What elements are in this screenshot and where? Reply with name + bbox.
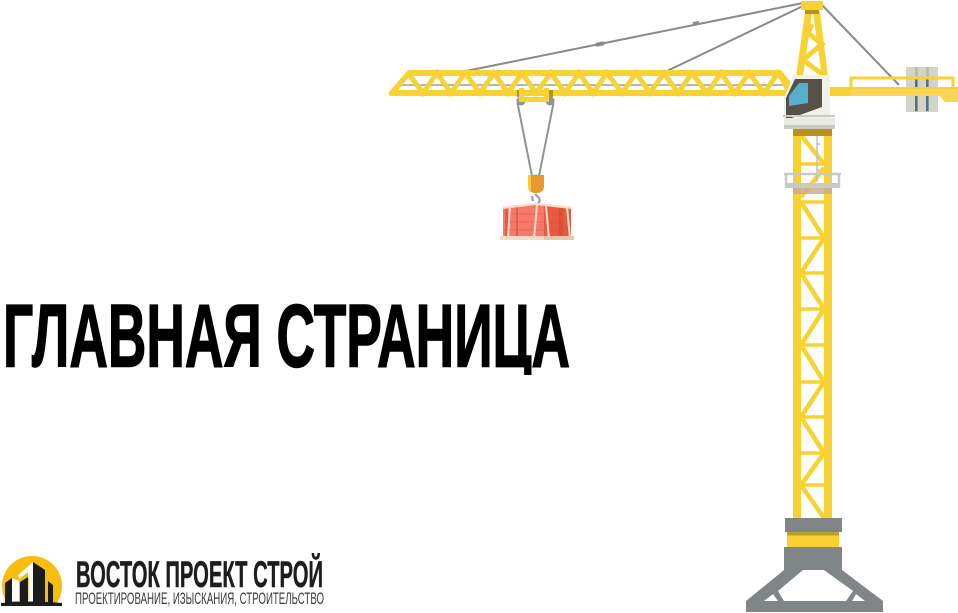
counter-jib with rail — [830, 78, 958, 102]
tower mast lattice — [793, 128, 832, 518]
hook block — [528, 174, 544, 203]
page title: ГЛАВНАЯ СТРАНИЦА — [3, 286, 570, 386]
trolley with pulleys — [516, 88, 554, 106]
company name: ВОСТОК ПРОЕКТ СТРОЙ — [76, 553, 323, 595]
hoist ropes — [518, 103, 554, 176]
logo emblem — [1, 556, 62, 606]
company logo — [1, 553, 324, 606]
tagline: ПРОЕКТИРОВАНИЕ, ИЗЫСКАНИЯ, СТРОИТЕЛЬСТВО — [75, 590, 324, 608]
lower platform — [784, 174, 841, 194]
tower base — [746, 518, 883, 612]
counterweights — [906, 67, 938, 112]
brick load on pallet — [500, 203, 574, 240]
cables: boom stays — [466, 3, 899, 85]
jib boom truss — [389, 70, 794, 96]
tower top mast — [796, 1, 828, 77]
operator cab — [783, 75, 835, 129]
mast collar — [793, 129, 832, 136]
tower crane — [389, 1, 958, 612]
